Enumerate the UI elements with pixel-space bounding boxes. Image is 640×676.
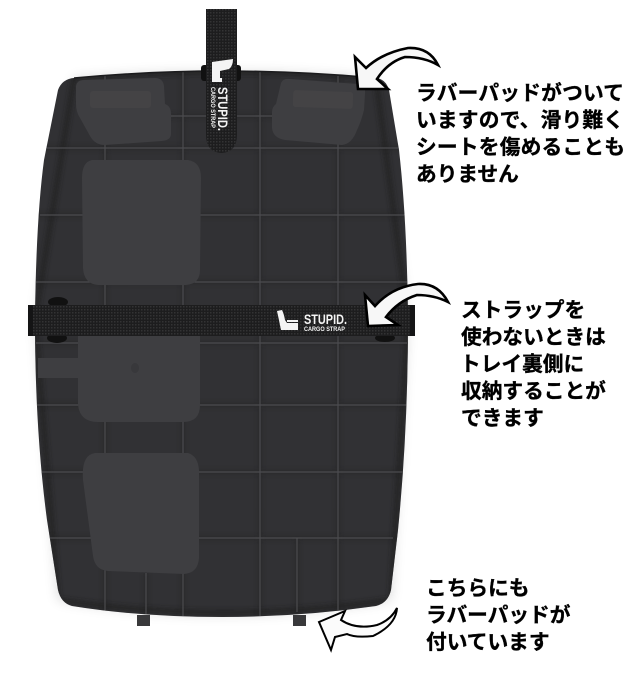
callout: rubber pads on bottom [426, 577, 571, 654]
rubber pad: top left [76, 78, 171, 145]
arrow: to stored strap [365, 284, 448, 326]
callout: strap storage: 使わないときは [461, 326, 606, 349]
rib shadows [35, 72, 410, 615]
vertical strap wordmark: STUPID. [215, 87, 231, 131]
callout: strap storage: ストラップを [461, 299, 585, 322]
callout: rubber pads on bottom: ラバーパッドが [426, 603, 571, 627]
arrow: to bottom rubber tabs [319, 608, 397, 650]
callout: rubber pads on top: ありません [416, 163, 519, 186]
logo mark on horizontal strap [277, 310, 298, 330]
vertical strap [206, 9, 237, 153]
callout: rubber pads on top [416, 81, 625, 186]
rubber pad: top right [272, 79, 365, 145]
callout: strap storage: トレイ裏側に [460, 353, 584, 376]
tray top edge highlight [74, 71, 376, 78]
logo mark on vertical strap [212, 59, 233, 82]
callout: rubber pads on top: シートを傷めることも [416, 136, 625, 159]
callout: strap storage: できます [461, 407, 544, 430]
horizontal strap wordmark: CARGO STRAP [304, 326, 346, 333]
callout: rubber pads on bottom: 付いています [426, 631, 550, 654]
callout: rubber pads on top: いますので、滑り難く [416, 109, 624, 132]
tray underside [35, 71, 410, 617]
soft shadow behind tray [35, 72, 408, 615]
callout: rubber pads on bottom: こちらにも [426, 577, 529, 600]
arrow: to top right rubber pad [355, 48, 438, 89]
rubber pad: middle large [38, 335, 200, 422]
ribs [36, 72, 407, 616]
strap clips [47, 65, 395, 343]
vertical strap wordmark [209, 87, 231, 131]
rim shadow [35, 72, 408, 612]
callout: strap storage: 収納することが [461, 379, 606, 403]
rubber tabs at bottom [137, 615, 306, 626]
horizontal strap wordmark [304, 311, 347, 333]
vertical strap wordmark: CARGO STRAP [209, 87, 216, 129]
rubber pad: lower large [83, 453, 199, 574]
rubber pad: upper large [82, 160, 201, 285]
callout: rubber pads on top: ラバーパッドがついて [416, 81, 624, 105]
horizontal strap [28, 305, 415, 336]
horizontal strap wordmark: STUPID. [304, 311, 347, 327]
callout: strap storage [460, 299, 606, 430]
